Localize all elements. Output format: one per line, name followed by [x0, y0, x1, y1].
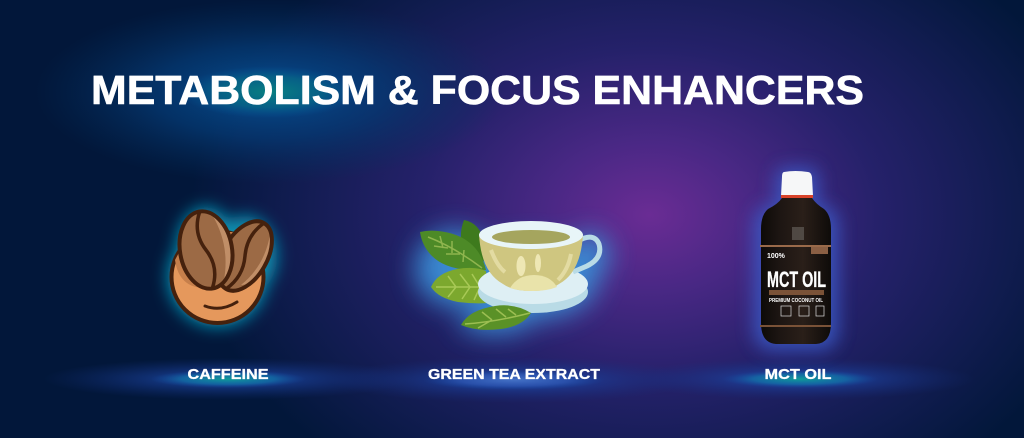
bottle label: MCT OIL [767, 267, 826, 292]
bottle label: PREMIUM COCONUT OIL [769, 298, 823, 304]
icon: green tea cup with leaves [415, 220, 610, 334]
lower leaf [461, 305, 531, 330]
saucer [478, 271, 588, 313]
back leaf [461, 220, 485, 266]
label: MCT oil: MCT OIL [764, 366, 832, 383]
floor glow: MCT oil [625, 358, 975, 400]
bottle label [760, 245, 831, 327]
icon: MCT oil bottle [754, 168, 838, 350]
label: caffeine: CAFFEINE [188, 366, 268, 383]
cup rim and tea [479, 221, 583, 249]
icon: coffee beans [168, 207, 283, 327]
bottle body [761, 198, 831, 344]
label: green tea extract: GREEN TEA EXTRACT [428, 366, 600, 383]
bottle cap [781, 171, 813, 196]
floor glow: green tea extract [329, 357, 699, 403]
cup [479, 234, 583, 291]
floor glow: caffeine [43, 358, 413, 400]
title: METABOLISM & FOCUS ENHANCERS [91, 67, 864, 113]
handle [573, 237, 600, 272]
upper leaf [420, 231, 486, 270]
bottle label: 100% [767, 253, 786, 260]
middle leaf [431, 268, 488, 303]
